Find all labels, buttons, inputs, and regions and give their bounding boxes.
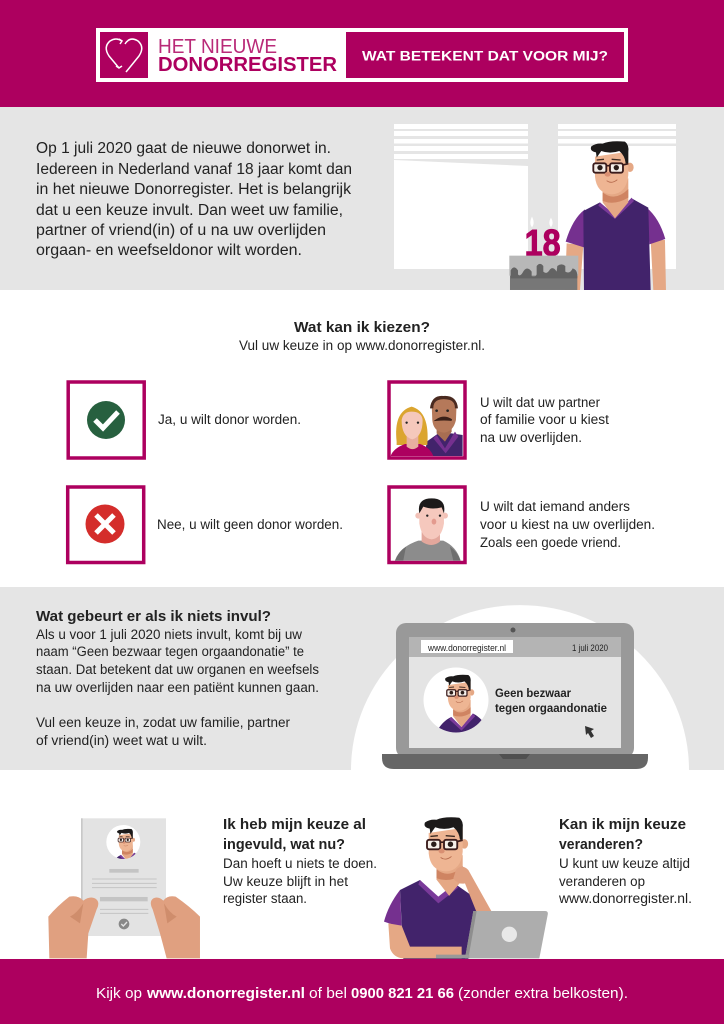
logo word: het nieuwe: HET NIEUWE: [158, 36, 277, 58]
heading: choices: Vul uw keuze in op www.donorregister.nl.: [239, 338, 485, 353]
man's arms: [565, 240, 666, 290]
laptop illustration: tegen orgaandonatie: [495, 701, 607, 715]
cake: [510, 275, 577, 290]
icon: check: [87, 401, 125, 439]
logo word: donorregister: DONORREGISTER: [158, 54, 338, 76]
intro text: [36, 140, 352, 259]
text block: nothing filled in: Wat gebeurt er als ik niets invul?: [36, 608, 271, 625]
option: partner or family: [389, 382, 609, 458]
text block: can I change: veranderen?: [559, 836, 643, 853]
text block: already filled in: register staan.: [223, 891, 307, 906]
footer: (zonder extra belkosten).: [458, 985, 628, 1002]
text block: nothing filled in: na uw overlijden naar een patiënt kunnen gaan.: [36, 680, 319, 695]
footer: www.donorregister.nl: [146, 985, 305, 1002]
intro text: Op 1 juli 2020 gaat de nieuwe donorwet in.: [36, 140, 331, 157]
intro text: partner of vriend(in) of u na uw overlijden: [36, 222, 326, 239]
footer: 0900 821 21 66: [351, 985, 454, 1002]
document with hands illustration: [48, 818, 200, 958]
footer: Kijk op: [96, 985, 142, 1002]
text block: nothing filled in: [36, 608, 319, 748]
text block: nothing filled in: Vul een keuze in, zodat uw familie, partner: [36, 715, 291, 730]
icon: recycling heart: [106, 39, 142, 72]
banner title: WAT BETEKENT DAT VOOR MIJ?: [362, 48, 608, 64]
intro text: orgaan- en weefseldonor wilt worden.: [36, 242, 302, 259]
man's collar: [598, 198, 634, 219]
option: partner or family: of familie voor u kiest: [480, 412, 609, 427]
header band: [0, 0, 724, 107]
text block: nothing filled in: naam “Geen bezwaar tegen orgaandonatie” te: [36, 644, 304, 659]
option: no: [68, 487, 343, 562]
text block: can I change: www.donorregister.nl.: [558, 891, 692, 906]
text block: can I change: Kan ik mijn keuze: [559, 816, 686, 833]
text block: can I change: [558, 816, 692, 906]
avatar: [439, 674, 482, 732]
footer: of bel: [309, 985, 347, 1002]
text block: already filled in: ingevuld, wat nu?: [223, 836, 345, 853]
option text: Nee, u wilt geen donor worden.: [157, 517, 343, 532]
option: someone else: Zoals een goede vriend.: [480, 535, 621, 550]
man's sleeves: [566, 208, 665, 247]
thinking man with laptop illustration: [384, 817, 548, 959]
intro text: dat u een keuze invult. Dan weet uw familie,: [36, 202, 343, 219]
text block: nothing filled in: staan. Dat betekent dat uw organen en weefsels: [36, 662, 319, 677]
option: yes: [68, 382, 301, 458]
intro text: Iedereen in Nederland vanaf 18 jaar komt dan: [36, 161, 352, 178]
option: partner or family: na uw overlijden.: [480, 430, 582, 445]
text block: can I change: veranderen op: [559, 874, 645, 889]
option text: U wilt dat iemand anders: [480, 499, 630, 514]
man's head: [591, 141, 634, 218]
date: 1 juli 2020: [572, 643, 608, 654]
text block: already filled in: Ik heb mijn keuze al: [223, 816, 366, 833]
laptop illustration: [382, 623, 648, 784]
intro text: in het nieuwe Donorregister. Het is belangrijk: [36, 181, 351, 198]
portrait: couple: [391, 396, 463, 456]
cake number: 18: [525, 222, 561, 264]
illustration: man with birthday cake: [509, 141, 666, 290]
text block: nothing filled in: Als u voor 1 juli 2020 niets invult, komt bij uw: [36, 627, 302, 642]
portrait: friend: [395, 498, 461, 561]
logo banner: [96, 28, 628, 82]
white semicircle: [351, 605, 689, 770]
text block: already filled in: Dan hoeft u niets te doen.: [223, 856, 377, 871]
panel: what if nothing background: [0, 587, 724, 770]
footer: [0, 959, 724, 1024]
cursor: [585, 726, 594, 738]
heading: choices: [239, 319, 485, 353]
url: www.donorregister.nl: [427, 643, 506, 654]
text block: can I change: U kunt uw keuze altijd: [559, 856, 690, 871]
option: someone else: [389, 487, 655, 562]
document avatar: [106, 825, 140, 859]
panel: intro background: [0, 107, 724, 290]
option text: Ja, u wilt donor worden.: [158, 412, 301, 427]
window illustration: [394, 124, 676, 269]
candle flames: [530, 217, 553, 227]
icon: cross: [86, 504, 124, 544]
option text: U wilt dat uw partner: [480, 395, 600, 410]
man's vest: [583, 198, 651, 290]
text block: nothing filled in: of vriend(in) weet wat u wilt.: [36, 733, 207, 748]
text block: already filled in: Uw keuze blijft in het: [223, 874, 348, 889]
status text: Geen bezwaar: [495, 686, 571, 700]
option: someone else: voor u kiest na uw overlijden.: [480, 517, 655, 532]
text block: already filled in: [223, 816, 377, 906]
heading: choices: Wat kan ik kiezen?: [294, 319, 430, 336]
